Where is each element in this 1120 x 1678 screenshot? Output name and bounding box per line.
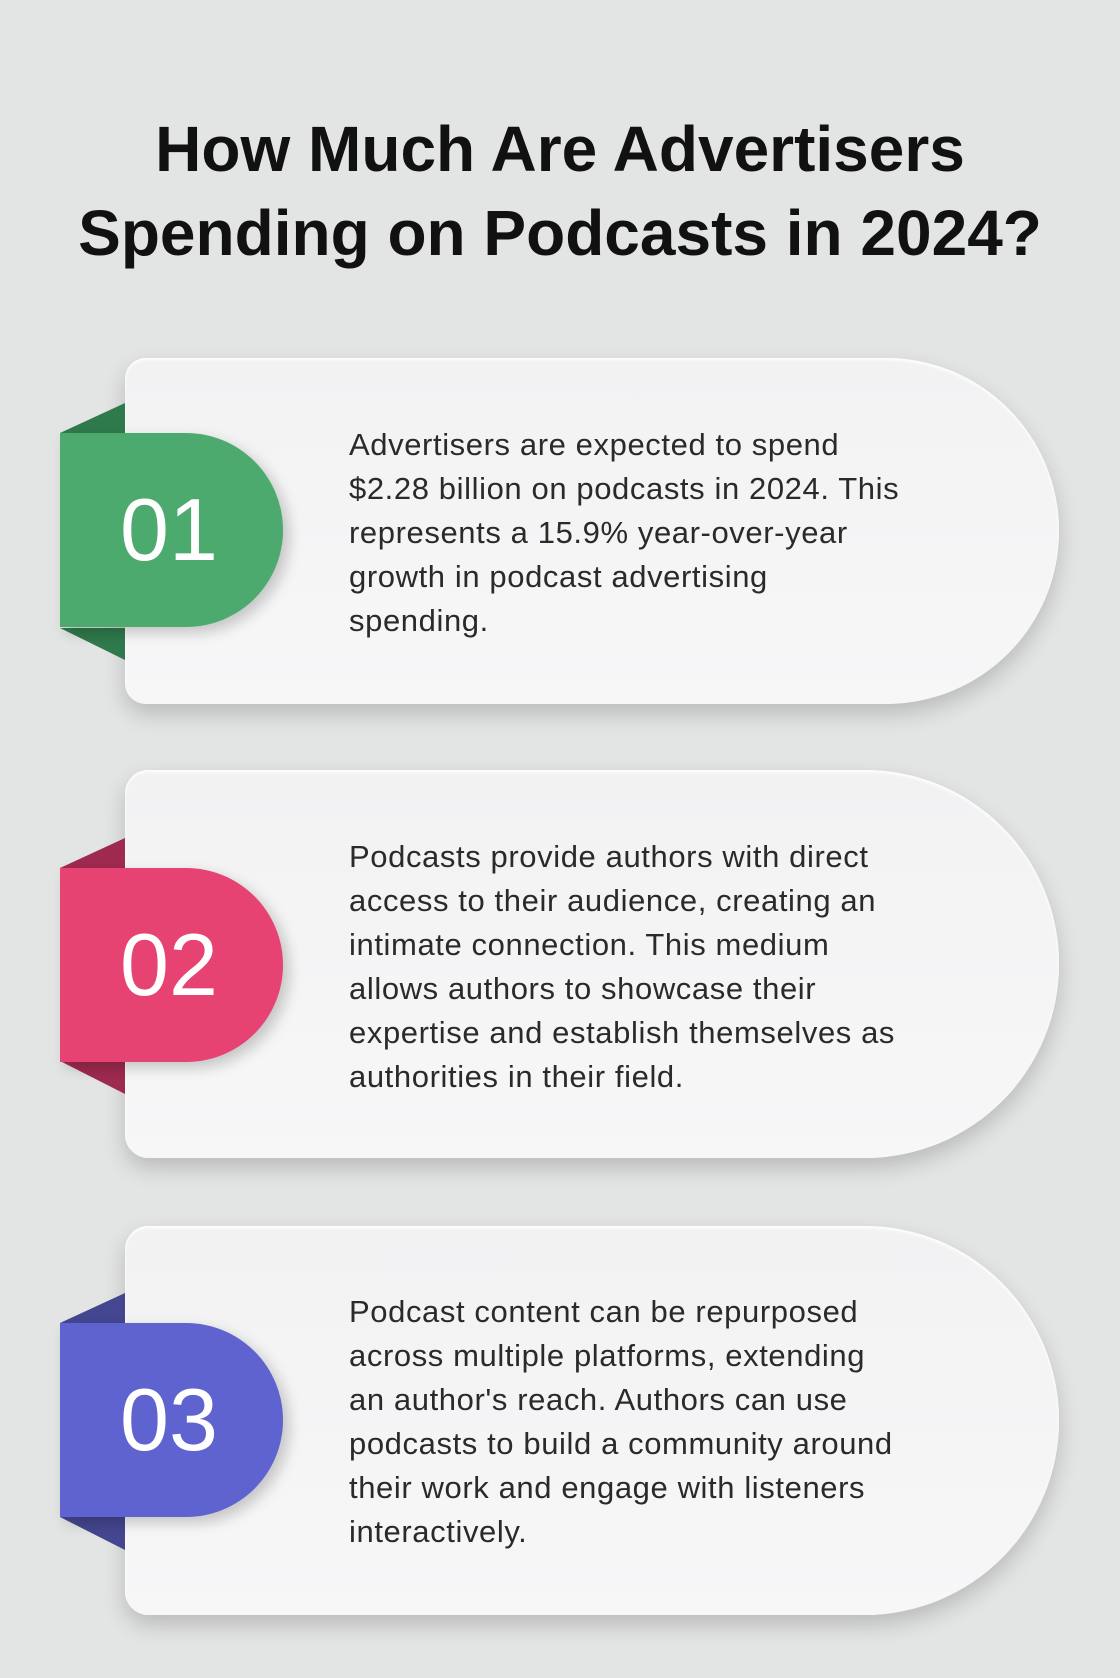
text: card 2	[349, 839, 895, 1094]
text: card 2: intimate connection. This medium	[349, 927, 829, 962]
text: card 1: spending.	[349, 603, 489, 638]
badge: 03	[60, 1323, 283, 1517]
text: card 3: interactively.	[349, 1514, 527, 1549]
fold: card 2	[60, 838, 125, 1094]
text: card 1: growth in podcast advertising	[349, 559, 768, 594]
text: card 1	[349, 427, 899, 638]
text: card 2: Podcasts provide authors with direct	[349, 839, 869, 874]
text: card 1: $2.28 billion on podcasts in 2024. This	[349, 471, 899, 506]
panel: card 2	[125, 770, 1059, 1158]
panel: card 1	[125, 358, 1059, 704]
text: card 2: allows authors to showcase their	[349, 971, 816, 1006]
text: card 2: access to their audience, creating an	[349, 883, 876, 918]
badge: 01: 01	[120, 480, 218, 579]
panel: card 3	[125, 1226, 1059, 1615]
text: card 3: their work and engage with listeners	[349, 1470, 865, 1505]
fold: card 3	[60, 1293, 125, 1550]
text: card 3	[349, 1294, 893, 1549]
badge: 02: 02	[120, 915, 218, 1014]
title	[78, 113, 1042, 269]
badge: 01	[60, 433, 283, 627]
text: card 1: Advertisers are expected to spend	[349, 427, 839, 462]
fold: card 1	[60, 403, 125, 660]
text: card 3: an author's reach. Authors can use	[349, 1382, 848, 1417]
text: card 2: authorities in their field.	[349, 1059, 684, 1094]
text: card 2: expertise and establish themselves as	[349, 1015, 895, 1050]
badge: 03: 03	[120, 1370, 218, 1469]
text: card 3: Podcast content can be repurposed	[349, 1294, 858, 1329]
text: card 3: across multiple platforms, extending	[349, 1338, 865, 1373]
badge: 02	[60, 868, 283, 1062]
text: card 3: podcasts to build a community around	[349, 1426, 893, 1461]
text: card 1: represents a 15.9% year-over-year	[349, 515, 848, 550]
title: How Much Are Advertisers	[155, 113, 965, 185]
title: Spending on Podcasts in 2024?	[78, 197, 1042, 269]
